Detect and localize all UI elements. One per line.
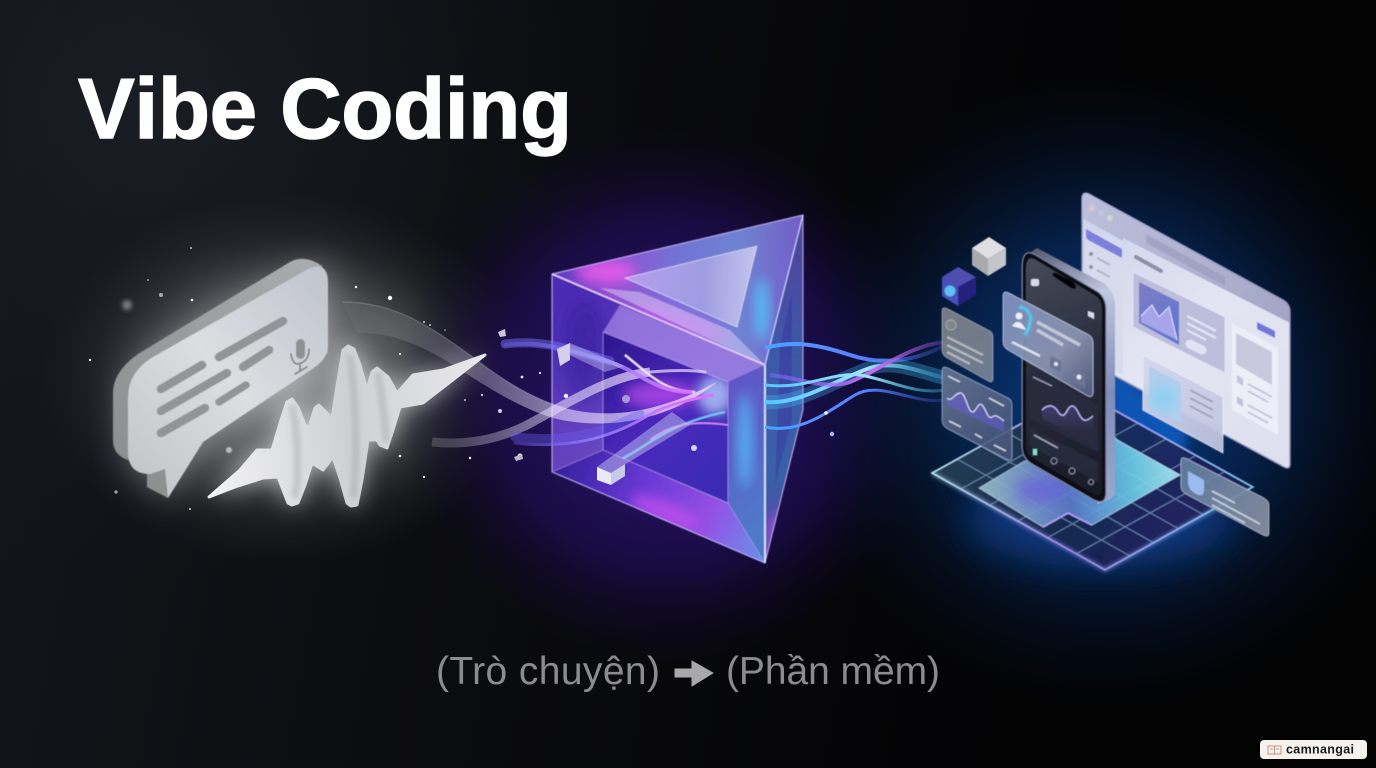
bubble text lines	[161, 321, 283, 433]
glass badge card	[1181, 458, 1269, 536]
arrow	[675, 661, 713, 686]
subtitle right: (Phần mềm)	[726, 650, 940, 693]
browser chart card	[1133, 272, 1225, 373]
saturated blue behind phone	[1110, 370, 1190, 473]
blue cube	[942, 267, 976, 306]
phone side	[1031, 248, 1115, 504]
prism: inner triangle	[625, 246, 757, 327]
glass chart card	[942, 367, 1012, 460]
prism: right face	[765, 215, 803, 568]
prism: top face	[552, 215, 803, 365]
phone nav icons	[1033, 449, 1094, 484]
prism: bottom rod	[597, 412, 690, 485]
browser address bar	[1146, 234, 1225, 286]
phone body	[1022, 253, 1106, 502]
bubble front face	[128, 266, 328, 498]
raised glass plate	[979, 430, 1180, 527]
bubble body	[113, 259, 328, 498]
prism: front frame	[552, 274, 765, 563]
phone top icons	[1031, 279, 1094, 319]
prism: edges	[552, 215, 803, 563]
white cube	[972, 237, 1006, 276]
phone notch	[1052, 273, 1076, 289]
chat bubble	[113, 259, 328, 498]
phone screen	[1026, 258, 1102, 495]
badge: camnangai	[1260, 740, 1367, 759]
sound waveform	[209, 345, 485, 506]
app stack	[932, 193, 1290, 570]
subtitle left: (Trò chuyện)	[436, 650, 660, 693]
browser window	[1082, 193, 1290, 468]
icon: microphone	[291, 339, 309, 374]
bubble back side	[113, 259, 328, 498]
blue app glow	[965, 472, 1235, 568]
browser right panel	[1232, 322, 1278, 435]
phone	[1022, 248, 1115, 504]
bubble glow	[128, 265, 328, 498]
glass list card	[942, 308, 993, 382]
glass card on phone	[1003, 292, 1093, 396]
prism	[552, 215, 803, 568]
prism rods	[557, 343, 690, 485]
ribbons: outgoing coloured streams	[765, 342, 945, 429]
sparkle particles	[89, 247, 834, 510]
browser sidebar	[1086, 229, 1123, 375]
phone chart panel	[1030, 371, 1098, 452]
browser title bar	[1082, 193, 1290, 323]
title: Vibe Coding	[78, 62, 572, 157]
prism: inner window	[603, 332, 733, 503]
browser floating card	[1143, 355, 1223, 453]
browser frame	[1082, 193, 1290, 468]
prism: top rod	[557, 343, 625, 372]
ribbons: incoming white and violet streams	[343, 302, 717, 445]
isometric grid platform	[932, 391, 1253, 570]
phone lower panel	[1030, 428, 1098, 482]
badge: camnangai: camnangai	[1286, 742, 1354, 756]
